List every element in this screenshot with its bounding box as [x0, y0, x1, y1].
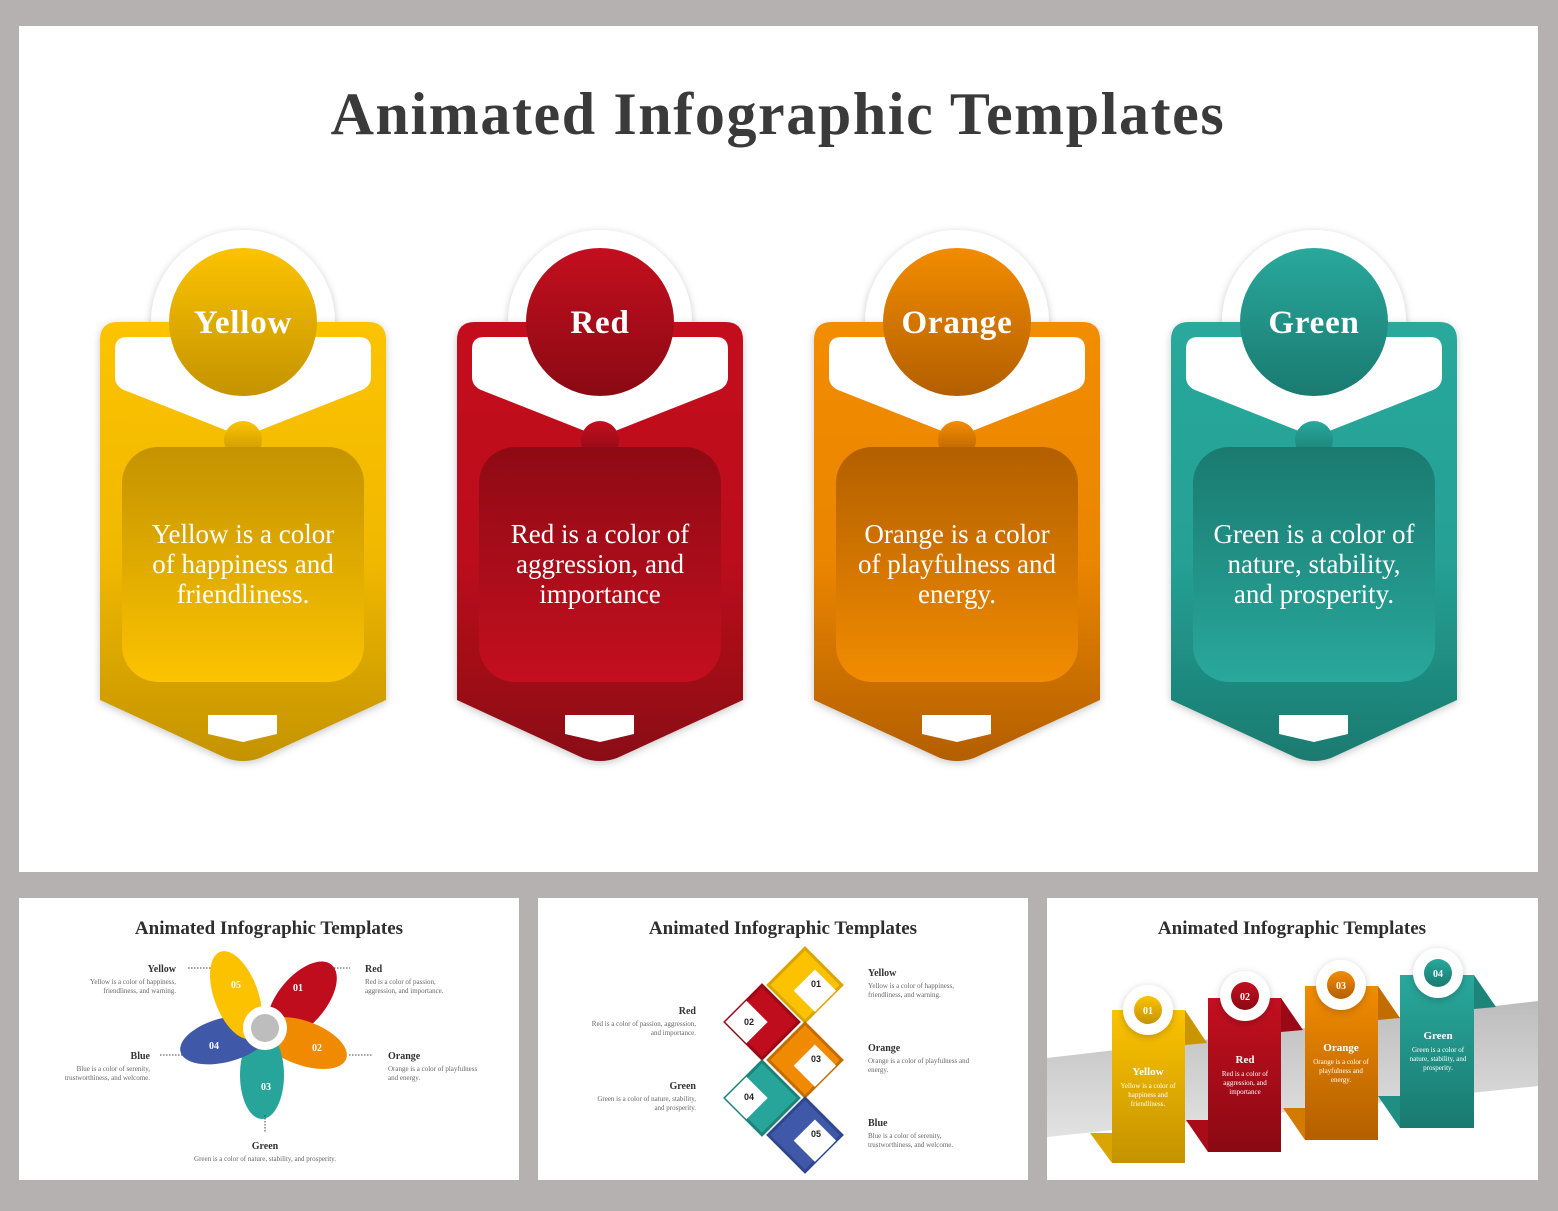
card: Yellow: of happiness and — [152, 549, 334, 579]
ribbons: Yellow is a color of — [1121, 1082, 1176, 1090]
star chart: 02 — [312, 1043, 322, 1054]
ribbons: prosperity. — [1423, 1064, 1453, 1072]
card: Green: Green is a color of — [1214, 519, 1414, 549]
diamond labels: Blue is a color of serenity, — [868, 1132, 942, 1140]
star labels: Green is a color of nature, stability, and prosperity. — [194, 1155, 336, 1163]
ribbons: Yellow — [1132, 1066, 1164, 1078]
diamond labels: and importance. — [651, 1029, 696, 1037]
ribbons: aggression, and — [1223, 1079, 1267, 1087]
diamond labels: energy. — [868, 1066, 888, 1074]
star chart: 04 — [209, 1041, 219, 1052]
main panel — [19, 26, 1538, 872]
card: Green: and prosperity. — [1234, 579, 1394, 609]
card: Orange: Orange — [901, 305, 1013, 341]
diamonds: 05 — [811, 1129, 821, 1139]
star chart: 05 — [231, 980, 241, 991]
card: Yellow: Yellow is a color — [152, 519, 334, 549]
diamond labels: Red is a color of passion, aggression, — [592, 1020, 696, 1028]
card: Green: Green — [1268, 305, 1360, 341]
card: Green: nature, stability, — [1228, 549, 1400, 579]
star labels: Green — [252, 1141, 279, 1152]
panel: ribbons thumbnail — [1047, 898, 1538, 1180]
card: Red: Red is a color of — [511, 519, 689, 549]
star labels: Orange is a color of playfulness — [388, 1065, 477, 1073]
thumbnail title: Animated Infographic Templates — [649, 918, 917, 939]
ribbons: Red is a color of — [1222, 1070, 1269, 1078]
star labels: aggression, and importance. — [365, 987, 444, 995]
diamond labels — [592, 968, 970, 1149]
ribbons: friendliness. — [1131, 1100, 1165, 1108]
diamonds: 02 — [744, 1017, 754, 1027]
star chart: 01 — [293, 983, 303, 994]
diamond labels: Orange — [868, 1043, 901, 1054]
star chart — [175, 944, 354, 1119]
gray band — [1047, 1001, 1538, 1137]
panel: diamonds thumbnail — [538, 898, 1028, 1180]
diamonds — [725, 948, 842, 1172]
card: Yellow — [100, 230, 386, 761]
ribbons: 04 — [1433, 969, 1443, 980]
diamond labels: Green is a color of nature, stability, — [597, 1095, 696, 1103]
ribbons: Orange is a color of — [1313, 1058, 1369, 1066]
star labels: Orange — [388, 1051, 421, 1062]
title: Animated Infographic Templates — [331, 81, 1225, 147]
ribbons: energy. — [1331, 1076, 1351, 1084]
card: Red — [457, 230, 743, 761]
diamond labels: Yellow — [868, 968, 897, 979]
card: Green — [1171, 230, 1457, 761]
diamond labels: Blue — [868, 1118, 888, 1129]
diamond labels: Red — [679, 1006, 696, 1017]
star labels — [65, 964, 477, 1163]
ribbons: 03 — [1336, 981, 1346, 992]
star chart: 03 — [261, 1082, 271, 1093]
diamond labels: Green — [670, 1081, 696, 1092]
card: Orange — [814, 230, 1100, 761]
diamond labels: Yellow is a color of happiness, — [868, 982, 954, 990]
ribbons: happiness and — [1128, 1091, 1168, 1099]
card: Red: Red — [570, 305, 630, 341]
card: Orange: Orange is a color — [864, 519, 1050, 549]
diamond labels: and prosperity. — [654, 1104, 696, 1112]
star labels: Blue — [131, 1051, 151, 1062]
ribbons: Green — [1423, 1030, 1453, 1042]
ribbons: 02 — [1240, 992, 1250, 1003]
card: Red: aggression, and — [516, 549, 684, 579]
thumbnail title: Animated Infographic Templates — [1158, 918, 1426, 939]
diamonds: 01 — [811, 979, 821, 989]
card: Red: importance — [539, 579, 661, 609]
ribbons: Orange — [1323, 1042, 1359, 1054]
ribbons: importance — [1229, 1088, 1261, 1096]
diamond labels: friendliness, and warning. — [868, 991, 941, 999]
card: Yellow: friendliness. — [177, 579, 309, 609]
ribbons — [1090, 948, 1496, 1163]
star labels: Red is a color of passion, — [365, 978, 436, 986]
card: Yellow: Yellow — [194, 305, 292, 341]
card: Orange: of playfulness and — [858, 549, 1056, 579]
diamond labels: Orange is a color of playfulness and — [868, 1057, 970, 1065]
diamonds: 04 — [744, 1092, 754, 1102]
ribbons: Green is a color of — [1412, 1046, 1465, 1054]
star labels: and energy. — [388, 1074, 420, 1082]
panel: star thumbnail — [19, 898, 519, 1180]
diamond labels: trustworthiness, and welcome. — [868, 1141, 953, 1149]
star labels: trustworthiness, and welcome. — [65, 1074, 150, 1082]
ribbons: playfulness and — [1319, 1067, 1363, 1075]
ribbons: Red — [1236, 1054, 1254, 1066]
star labels: Blue is a color of serenity, — [77, 1065, 150, 1073]
ribbons: 01 — [1143, 1006, 1153, 1017]
diamonds: 03 — [811, 1054, 821, 1064]
card: Orange: energy. — [918, 579, 996, 609]
ribbons: nature, stability, and — [1410, 1055, 1467, 1063]
star labels: friendliness, and warning. — [103, 987, 176, 995]
star labels: Yellow is a color of happiness, — [90, 978, 176, 986]
star labels: Yellow — [148, 964, 177, 975]
star labels: Red — [365, 964, 383, 975]
thumbnail title: Animated Infographic Templates — [135, 918, 403, 939]
